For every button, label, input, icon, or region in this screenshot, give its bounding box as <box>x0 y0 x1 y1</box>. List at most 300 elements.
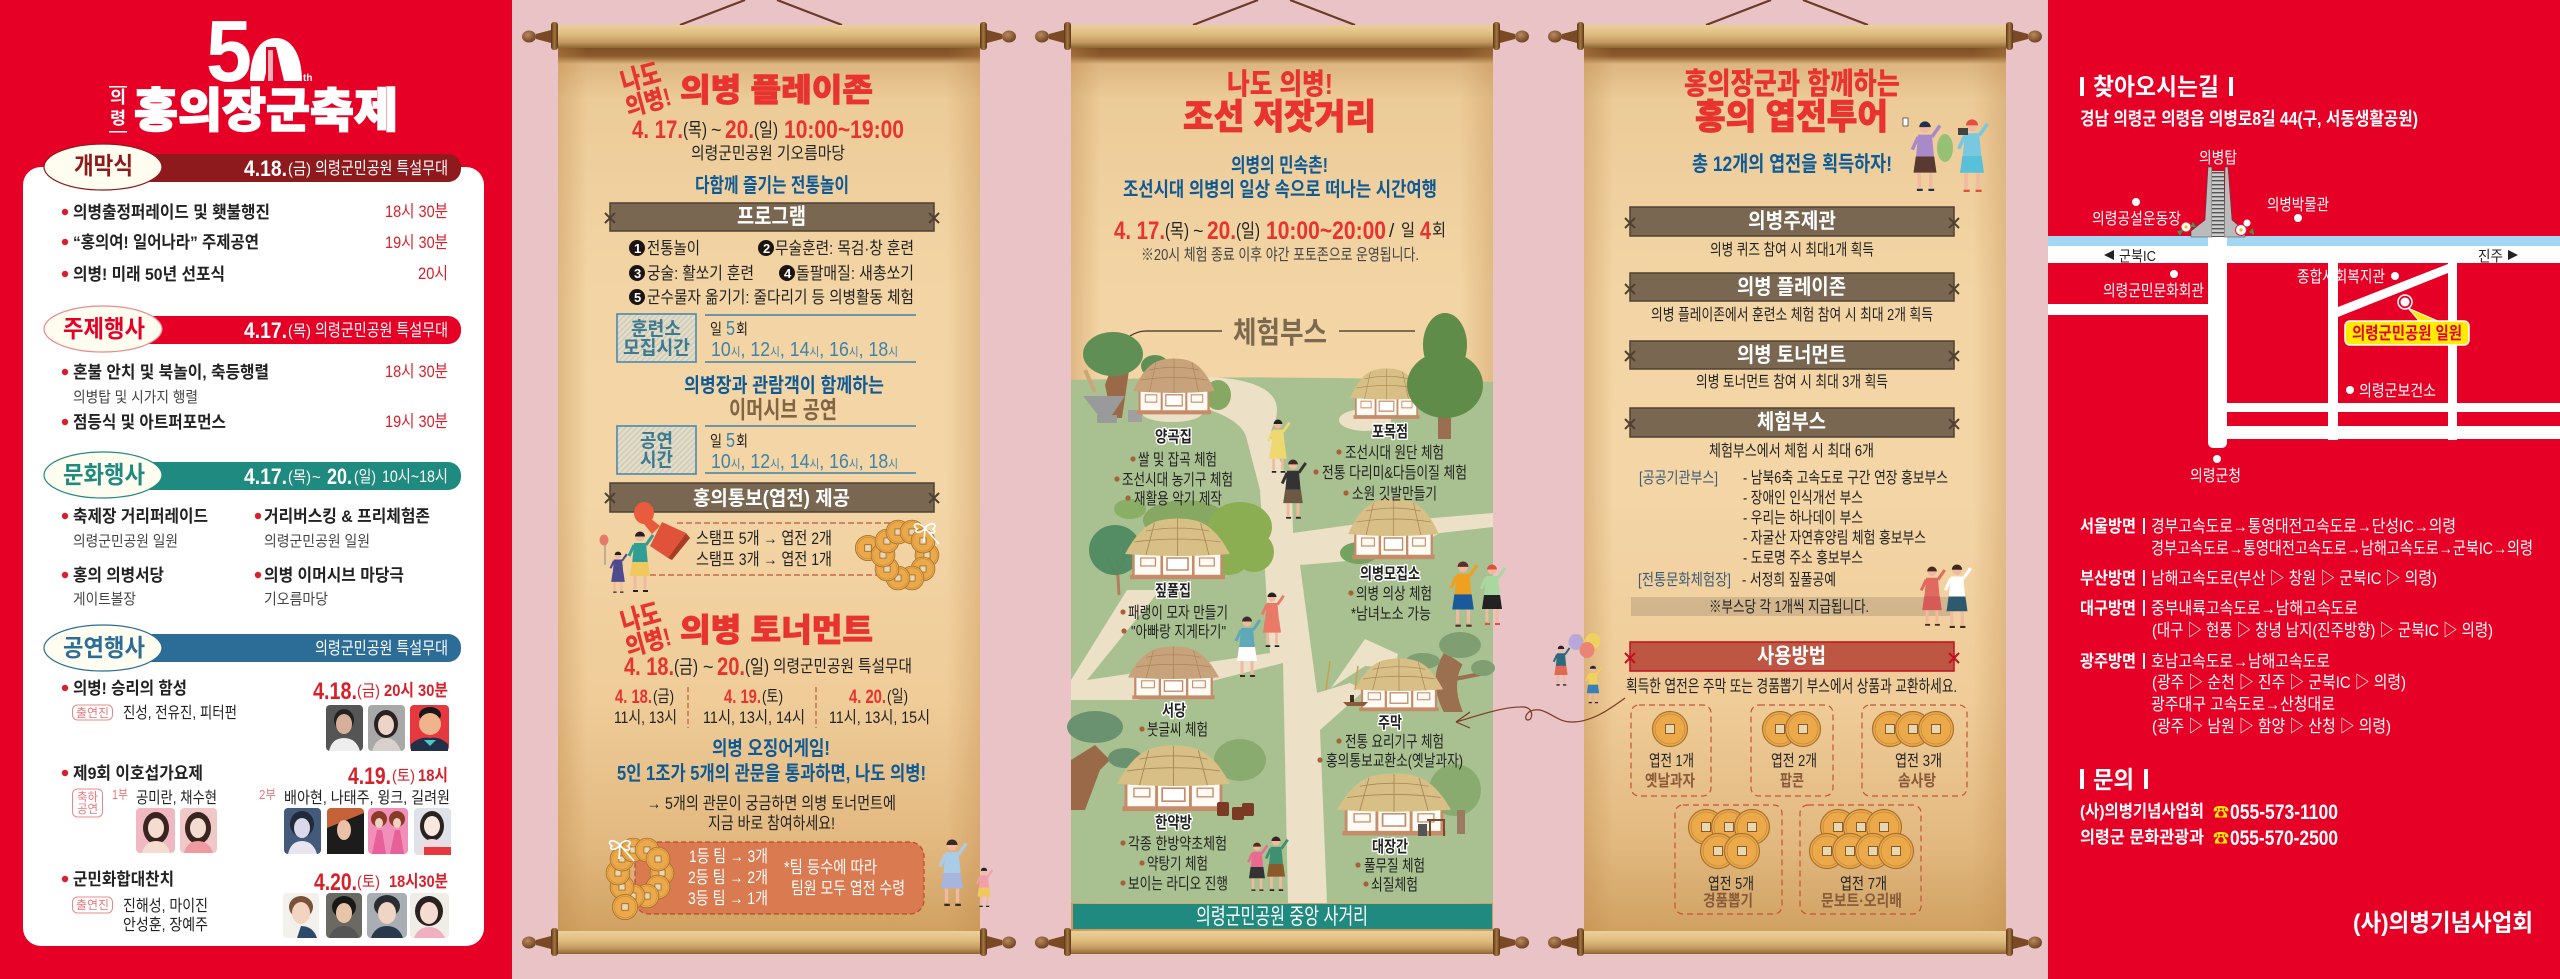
date and hours: 10:00~20:00 <box>1266 217 1386 245</box>
date and hours: ~ <box>1193 221 1204 241</box>
heading: tournament: 의병 토너먼트 <box>680 612 873 648</box>
stage: tournament: 의병 토너먼트 <box>1737 344 1846 367</box>
booth list: ※부스당 각 1개씩 지급됩니다. <box>1709 598 1869 616</box>
village map <box>1067 313 1505 903</box>
tournament schedule: (금) <box>653 687 674 706</box>
heading: joseon street: 조선 저잣거리 <box>1183 98 1376 137</box>
scroll frame <box>522 0 1016 956</box>
contact: 055-570-2500 <box>2230 827 2338 850</box>
booth list: [공공기관부스] <box>1639 469 1718 487</box>
booth: hanyakbang: 약탕기 체험 <box>1147 855 1208 873</box>
contact <box>2080 767 2338 850</box>
immersive performance times: 일 <box>710 433 722 450</box>
performance: song festival: 제9회 이호섭가요제 <box>73 764 203 783</box>
route directions: 중부내륙고속도로→남해고속도로 <box>2151 599 2358 618</box>
scroll frame <box>1548 0 2042 956</box>
booth: jumak: 전통 요리기구 체험 <box>1345 733 1444 751</box>
stage: tournament: 의병 토너먼트 참여 시 최대 3개 획득 <box>1696 373 1888 391</box>
icon: kids with balloons <box>1554 633 1601 703</box>
tournament schedule: (일) <box>887 687 908 706</box>
section: main events: 의병탑 및 시가지 행렬 <box>73 389 198 406</box>
contact: 055-573-1100 <box>2230 801 2338 824</box>
programme list: 2 <box>763 241 770 256</box>
roads <box>2048 236 2560 448</box>
training camp times: 훈련소 <box>631 318 681 340</box>
section: opening ceremony <box>44 144 461 284</box>
immersive performance times: 의병장과 관람객이 함께하는 <box>684 374 884 397</box>
tournament description: → 5개의 관문이 궁금하면 의병 토너먼트에 <box>647 794 896 813</box>
heading: directions: 찾아오시는길 <box>2093 74 2219 101</box>
prize box: 팀원 모두 엽전 수령 <box>791 879 905 898</box>
immersive performance times: 이머시브 공연 <box>729 397 837 424</box>
heading: play zone: 4. 17. <box>632 116 683 144</box>
performance: song festival: (토) <box>392 768 415 785</box>
booth: jumak: 주막 <box>1378 714 1402 732</box>
section: cultural events: 홍의 의병서당 <box>73 566 164 585</box>
section: cultural events: (목) <box>288 469 311 486</box>
booth list: - 우리는 하나데이 부스 <box>1743 509 1863 527</box>
reward: two coins: 엽전 2개 <box>1771 752 1817 770</box>
immersive performance times: 10시, 12시, 14시, 16시, 18시 <box>711 451 898 473</box>
heading: tournament: 4. 18. <box>624 653 674 681</box>
programme list: 무술훈련: 목검·창 훈련 <box>775 239 914 258</box>
programme list: 5 <box>634 290 641 305</box>
panel: joseon street scroll <box>1035 0 1529 956</box>
reward: two coins <box>1751 705 1833 796</box>
reward: five coins <box>1675 805 1782 914</box>
usage banner: 획득한 엽전은 주막 또는 경품뽑기 부스에서 상품과 교환하세요. <box>1626 677 1957 696</box>
heading: joseon street <box>1123 68 1437 201</box>
route directions: 부산방면 <box>2080 569 2136 588</box>
booth: jipuljip: 짚풀집 <box>1155 582 1191 600</box>
route directions: 광주대구 고속도로→산청대로 <box>2151 695 2335 714</box>
tournament schedule: (토) <box>762 687 783 706</box>
booth: smithy: 쇠질체험 <box>1371 876 1418 894</box>
stage: booths: 체험부스 <box>1757 411 1826 434</box>
festival logo: th <box>303 73 312 84</box>
heading: play zone <box>616 57 904 197</box>
programme list: 3 <box>634 266 641 281</box>
stamp exchange: 스탬프 5개 → 엽전 2개 <box>696 529 832 548</box>
festival logo: 의 <box>110 88 126 107</box>
heading: directions: 경남 의령군 의령읍 의병로8길 44(구, 서동생활공원) <box>2080 109 2418 129</box>
booth list <box>1631 469 1950 616</box>
section: cultural events: ~ <box>312 469 321 486</box>
booth: recruitment: 의병모집소 <box>1360 565 1420 583</box>
training camp times: 일 <box>710 321 722 338</box>
performance: citizens gala: 18시30분 <box>389 872 448 891</box>
section: opening ceremony: 19시 30분 <box>385 233 448 252</box>
location banner <box>1073 904 1492 929</box>
roads <box>1071 377 1493 903</box>
tournament schedule <box>614 687 930 728</box>
programme list: 돌팔매질: 새총쏘기 <box>796 264 914 283</box>
section: main events: 의령군민공원 특설무대 <box>315 321 448 340</box>
location map: 의령군보건소 <box>2359 382 2436 400</box>
performance: song festival: 공연 <box>77 802 98 816</box>
stage: theme hall: 의병 퀴즈 참여 시 최대1개 획득 <box>1710 241 1874 259</box>
stage: play zone: 의병 플레이존 <box>1737 276 1846 299</box>
route directions: 경부고속도로→통영대전고속도로→단성IC→의령 <box>2151 517 2456 536</box>
reward: one coin <box>1631 705 1711 796</box>
booth: pomokjeom: 조선시대 원단 체험 <box>1345 444 1444 462</box>
section: cultural events: (일) <box>354 468 376 486</box>
location map: 의병박물관 <box>2267 196 2329 214</box>
route directions: 남해고속도로(부산 ▷ 창원 ▷ 군북IC ▷ 의령) <box>2151 569 2437 588</box>
section: opening ceremony: 의병출정퍼레이드 및 횃불행진 <box>73 203 270 222</box>
booth: hanyakbang: 각종 한방약초체험 <box>1128 835 1227 853</box>
date and hours: 일 <box>1401 221 1415 240</box>
booth: smithy: 대장간 <box>1372 838 1408 856</box>
contact: ☎ <box>2213 829 2229 848</box>
callout: festival location <box>2345 295 2469 345</box>
arrow: curly line to jumak <box>1456 698 1625 728</box>
reward: seven coins <box>1800 805 1921 914</box>
programme list <box>629 239 914 307</box>
performance: victory shout: 출연진 <box>76 706 109 720</box>
reward: seven coins: 문보트·오리배 <box>1821 892 1902 910</box>
tournament description: 지금 바로 참여하세요! <box>708 814 835 833</box>
panel: festival programme <box>0 0 512 979</box>
programme banner: 프로그램 <box>737 204 806 229</box>
prize box: 1등 팀 → 3개 <box>689 847 768 866</box>
heading: tournament: 나도 <box>617 598 664 637</box>
section: cultural events: 의령군민공원 일원 <box>264 533 370 550</box>
route directions: 호남고속도로→남해고속도로 <box>2151 652 2330 671</box>
tournament schedule: 4. 19. <box>724 687 761 708</box>
stage: booths: 체험부스에서 체험 시 최대 6개 <box>1709 442 1874 460</box>
training camp times: 회 <box>736 321 748 338</box>
prize box: *팀 등수에 따라 <box>784 858 877 877</box>
route directions <box>2080 517 2533 736</box>
performance: citizens gala: 군민화합대찬치 <box>73 870 174 889</box>
booth: seodang <box>1139 702 1208 739</box>
date and hours: (일) <box>1236 220 1260 242</box>
booth: yanggokjip: 양곡집 <box>1155 428 1192 446</box>
stage: play zone <box>1625 273 1959 324</box>
tournament description: 의병 오징어게임! <box>712 737 830 760</box>
heading: play zone: 20. <box>725 116 754 144</box>
usage banner: 사용방법 <box>1757 645 1826 668</box>
booth: seodang: 서당 <box>1162 702 1186 720</box>
route directions: (광주 ▷ 남원 ▷ 함양 ▷ 산청 ▷ 의령) <box>2152 717 2391 736</box>
programme list: 1 <box>634 241 641 256</box>
heading: play zone: (목) <box>683 120 707 141</box>
location map: 의령군청 <box>2190 467 2241 485</box>
contact: (사)의병기념사업회 <box>2080 802 2204 821</box>
reward: three coins: 솜사탕 <box>1898 772 1936 790</box>
booth: jipuljip <box>1120 582 1228 641</box>
heading: tournament: (일) <box>745 656 769 678</box>
route directions: 광주방면 <box>2080 652 2136 671</box>
section: cultural events: 게이트볼장 <box>73 591 136 608</box>
big tree <box>1407 313 1483 439</box>
performance: citizens gala <box>62 869 449 938</box>
tournament schedule: 11시, 13시, 14시 <box>703 708 805 727</box>
section: main events: 18시 30분 <box>385 362 448 381</box>
location map: 군북IC <box>2119 248 2156 265</box>
stamp exchange <box>650 523 895 575</box>
booth: jipuljip: "아빠랑 지게타기" <box>1131 623 1226 641</box>
location banner: 의령군민공원 중앙 사거리 <box>1196 904 1368 929</box>
section: cultural events: 20. <box>327 464 352 489</box>
stage: play zone: 의병 플레이존에서 훈련소 체험 참여 시 최대 2개 획득 <box>1651 306 1933 324</box>
section: cultural events: 기오름마당 <box>264 591 328 608</box>
performance: victory shout: 20시 30분 <box>384 681 448 700</box>
training camp times <box>617 314 916 362</box>
scroll frame <box>1035 0 1529 956</box>
callout: festival location: 의령군민공원 일원 <box>2352 324 2462 343</box>
reward: two coins: 팝콘 <box>1780 772 1804 790</box>
immersive performance times: 5 <box>726 430 735 452</box>
booth: yanggokjip <box>1114 428 1233 508</box>
tour stages <box>1625 207 1959 460</box>
performance: citizens gala: (토) <box>357 874 380 891</box>
tournament schedule: 11시, 13시, 15시 <box>829 708 930 727</box>
coin banner: 홍의통보(엽전) 제공 <box>693 487 850 510</box>
booth list: [전통문화체험장] <box>1638 571 1731 589</box>
heading: play zone: ~ <box>711 120 722 140</box>
booth list: - 서정희 짚풀공예 <box>1742 571 1836 589</box>
tournament schedule: 4. 18. <box>615 687 652 708</box>
icon: coin string lower <box>606 838 674 920</box>
panel: play zone scroll <box>522 0 1016 956</box>
booth: recruitment <box>1348 565 1432 623</box>
programme list: 4 <box>784 266 792 281</box>
booth: hanyakbang <box>1120 814 1228 893</box>
performance: citizens gala: 4.20. <box>314 869 357 896</box>
tournament description <box>617 737 926 833</box>
section: performances: 의령군민공원 특설무대 <box>315 639 448 658</box>
performance: song festival: 축하 <box>77 790 98 804</box>
stamp exchange: 스탬프 3개 → 엽전 1개 <box>696 550 832 569</box>
heading: play zone: 의령군민공원 기오름마당 <box>691 144 845 163</box>
section: opening ceremony: “홍의여! 일어나라” 주제공연 <box>73 233 259 252</box>
reward: seven coins: 엽전 7개 <box>1840 875 1887 893</box>
heading: coin tour <box>1684 68 1900 176</box>
performance: victory shout: 4.18. <box>313 678 357 705</box>
performance: song festival: 1부 <box>112 787 128 802</box>
booth: jumak: 홍의통보교환소(옛날과자) <box>1326 752 1463 770</box>
river <box>2048 236 2560 246</box>
heading: tournament <box>616 597 912 681</box>
tournament schedule: 4. 20. <box>849 687 886 708</box>
booth: yanggokjip: 쌀 및 잡곡 체험 <box>1138 451 1217 469</box>
section: opening ceremony: 의병! 미래 50년 선포식 <box>73 265 225 284</box>
booth: recruitment: *남녀노소 가능 <box>1351 605 1431 623</box>
contact: 문의 <box>2093 767 2134 794</box>
training camp times: 5 <box>726 318 735 340</box>
booth: jumak <box>1317 714 1463 770</box>
jars and anvil <box>1217 695 1444 836</box>
booth: jipuljip: 패랭이 모자 만들기 <box>1128 604 1228 622</box>
heading: experience booths: 체험부스 <box>1233 317 1327 350</box>
heading: coin tour: 홍의장군과 함께하는 <box>1684 68 1900 101</box>
section: cultural events: 의병 이머시브 마당극 <box>264 566 404 585</box>
section: cultural events: 문화행사 <box>63 462 145 489</box>
ground <box>1071 377 1493 903</box>
stage: theme hall: 의병주제관 <box>1748 210 1836 233</box>
section: main events <box>44 306 461 432</box>
heading: tournament: (금) <box>674 657 698 678</box>
performance: citizens gala: 진해성, 마이진 <box>123 897 208 915</box>
tournament schedule: 11시, 13시 <box>614 708 677 727</box>
booth list: - 남북6축 고속도로 구간 연장 홍보부스 <box>1743 469 1948 487</box>
booth: pomokjeom: 포목점 <box>1372 423 1408 441</box>
immersive performance times <box>617 374 916 474</box>
booth: yanggokjip: 재활용 악기 제작 <box>1134 490 1222 508</box>
section: opening ceremony: 18시 30분 <box>385 202 448 221</box>
icon: coin string <box>855 520 939 590</box>
booth list: - 자굴산 자연휴양림 체험 홍보부스 <box>1743 529 1926 547</box>
booth: pomokjeom: 소원 깃발만들기 <box>1352 485 1437 503</box>
location map: 종합사회복지관 <box>2297 268 2385 286</box>
prize box: 2등 팀 → 2개 <box>688 868 768 887</box>
prize box: 3등 팀 → 1개 <box>688 889 768 908</box>
programme list: 궁술: 활쏘기 훈련 <box>647 264 754 283</box>
heading: coin tour: 총 12개의 엽전을 획득하자! <box>1692 153 1892 176</box>
date and hours: 4. 17. <box>1114 217 1165 245</box>
section: cultural events: 축제장 거리퍼레이드 <box>73 507 208 526</box>
panel: directions <box>2048 0 2560 979</box>
booth: seodang: 붓글씨 체험 <box>1147 721 1208 739</box>
booth list: - 도로명 주소 홍보부스 <box>1743 549 1863 567</box>
performance: song festival: 2부 <box>259 787 276 802</box>
performance: song festival: 공미란, 채수현 <box>136 789 217 807</box>
section: cultural events: 거리버스킹 & 프리체험존 <box>264 507 430 526</box>
section: main events: 주제행사 <box>63 316 145 343</box>
section: main events: 점등식 및 아트퍼포먼스 <box>73 413 226 432</box>
houses <box>1117 358 1451 834</box>
icon: couple <box>1921 564 1971 627</box>
location map: 의령군민문화회관 <box>2103 282 2204 300</box>
heading: play zone: 10:00~19:00 <box>784 116 904 144</box>
performance: victory shout: 진성, 전유진, 피터펀 <box>123 704 237 722</box>
icon: stamp and family <box>600 502 690 592</box>
section: opening ceremony: 4.18. <box>244 156 287 181</box>
festival logo: 홍의장군축제 <box>134 84 398 137</box>
stage: tournament <box>1625 341 1959 391</box>
reward: five coins: 경품뽑기 <box>1703 892 1753 910</box>
heading: directions <box>2080 74 2418 129</box>
performance: victory shout: 의병! 승리의 함성 <box>73 679 187 698</box>
performance: song festival: 배아현, 나태주, 윙크, 길려원 <box>284 789 450 807</box>
performance: song festival: 4.19. <box>348 763 391 790</box>
usage banner <box>1625 642 1959 696</box>
heading: play zone: 의병 플레이존 <box>680 72 873 108</box>
heading: tournament: 20. <box>717 653 745 681</box>
section: opening ceremony: 20시 <box>418 264 448 283</box>
panel: coin tour scroll <box>1456 0 2042 956</box>
icon: memorial tower <box>2177 167 2254 237</box>
icon: mother and child <box>940 839 992 906</box>
heading: joseon street: 나도 의병! <box>1227 68 1333 101</box>
booth list: - 장애인 인식개선 부스 <box>1743 489 1863 507</box>
reward: five coins: 엽전 5개 <box>1708 875 1754 893</box>
heading: tournament: ~ <box>703 657 714 677</box>
booth: recruitment: 의병 의상 체험 <box>1356 585 1432 603</box>
booth: pomokjeom <box>1313 423 1467 503</box>
performance: citizens gala: 출연진 <box>76 898 109 912</box>
trees and bushes <box>1067 332 1495 834</box>
heading: coin tour: 홍의 엽전투어 <box>1695 98 1888 137</box>
performance: song festival: 18시 <box>418 766 448 785</box>
section: main events: 혼불 안치 및 북놀이, 축등행렬 <box>73 363 269 382</box>
immersive performance times: 시간 <box>640 449 673 471</box>
reward: three coins <box>1862 705 1967 796</box>
programme banner <box>605 203 939 231</box>
training camp times: 10시, 12시, 14시, 16시, 18시 <box>711 339 898 361</box>
performance: citizens gala: 안성훈, 장예주 <box>123 916 208 934</box>
section: main events: (목) <box>288 323 311 340</box>
date and hours: 4 <box>1420 217 1431 245</box>
organiser: (사)의병기념사업회 <box>2353 910 2533 937</box>
date and hours <box>1114 217 1446 264</box>
booth: pomokjeom: 전통 다리미&다듬이질 체험 <box>1322 464 1467 482</box>
programme list: 전통놀이 <box>647 239 700 258</box>
date and hours: / <box>1389 221 1395 242</box>
tournament description: 5인 1조가 5개의 관문을 통과하면, 나도 의병! <box>617 762 926 785</box>
performance: victory shout: (금) <box>357 683 380 700</box>
festival logo <box>109 3 398 137</box>
stage: booths <box>1625 408 1959 460</box>
section: opening ceremony: 의령군민공원 특설무대 <box>315 159 448 178</box>
location map: 의병탑 <box>2199 149 2237 167</box>
date and hours: 회 <box>1432 221 1446 240</box>
immersive performance times: 공연 <box>640 430 673 452</box>
white schedule card <box>23 167 484 946</box>
heading: play zone: (일) <box>754 119 778 141</box>
booth: hanyakbang: 보이는 라디오 진행 <box>1128 875 1228 893</box>
festival logo: 령 <box>110 109 126 128</box>
section: cultural events: 4.17. <box>244 464 287 489</box>
heading: play zone: 의병! <box>623 83 674 122</box>
heading: play zone: 다함께 즐기는 전통놀이 <box>695 174 849 197</box>
coin banner <box>605 483 939 512</box>
performance: victory shout <box>62 678 449 751</box>
heading: joseon street: 조선시대 의병의 일상 속으로 떠나는 시간여행 <box>1123 178 1437 201</box>
training camp times: 모집시간 <box>623 337 690 359</box>
heading: experience booths <box>1130 317 1415 350</box>
section: cultural events <box>44 452 461 608</box>
location map: 의령공설운동장 <box>2092 210 2181 228</box>
booth: smithy: 풀무질 체험 <box>1364 857 1425 875</box>
heading: play zone: 나도 <box>617 58 664 97</box>
date and hours: (목) <box>1165 221 1189 242</box>
visitors <box>1236 420 1505 890</box>
heading: joseon street: 의병의 민속촌! <box>1231 154 1328 177</box>
route directions: (대구 ▷ 현풍 ▷ 창녕 남지(진주방향) ▷ 군북IC ▷ 의령) <box>2152 621 2493 640</box>
date and hours: 20. <box>1207 217 1236 245</box>
route directions: (광주 ▷ 순천 ▷ 진주 ▷ 군북IC ▷ 의령) <box>2152 673 2406 692</box>
booth: yanggokjip: 조선시대 농기구 체험 <box>1122 471 1233 489</box>
contact: ☎ <box>2213 803 2229 822</box>
route directions: 서울방면 <box>2080 517 2136 536</box>
section: main events: 4.17. <box>244 318 287 343</box>
festival logo: 5 <box>206 3 252 100</box>
contact: 의령군 문화관광과 <box>2080 828 2204 847</box>
booth: smithy <box>1355 838 1425 894</box>
location map: 진주 <box>2478 248 2503 265</box>
booth: hanyakbang: 한약방 <box>1155 814 1192 832</box>
performance: song festival <box>62 763 451 855</box>
heading: tournament: 의령군민공원 특설무대 <box>773 657 912 676</box>
heading: tournament: 의병! <box>623 623 674 662</box>
section: main events: 19시 30분 <box>385 412 448 431</box>
section: opening ceremony: 개막식 <box>74 153 133 180</box>
immersive performance times: 회 <box>736 433 748 450</box>
section: cultural events: 의령군민공원 일원 <box>73 533 178 550</box>
